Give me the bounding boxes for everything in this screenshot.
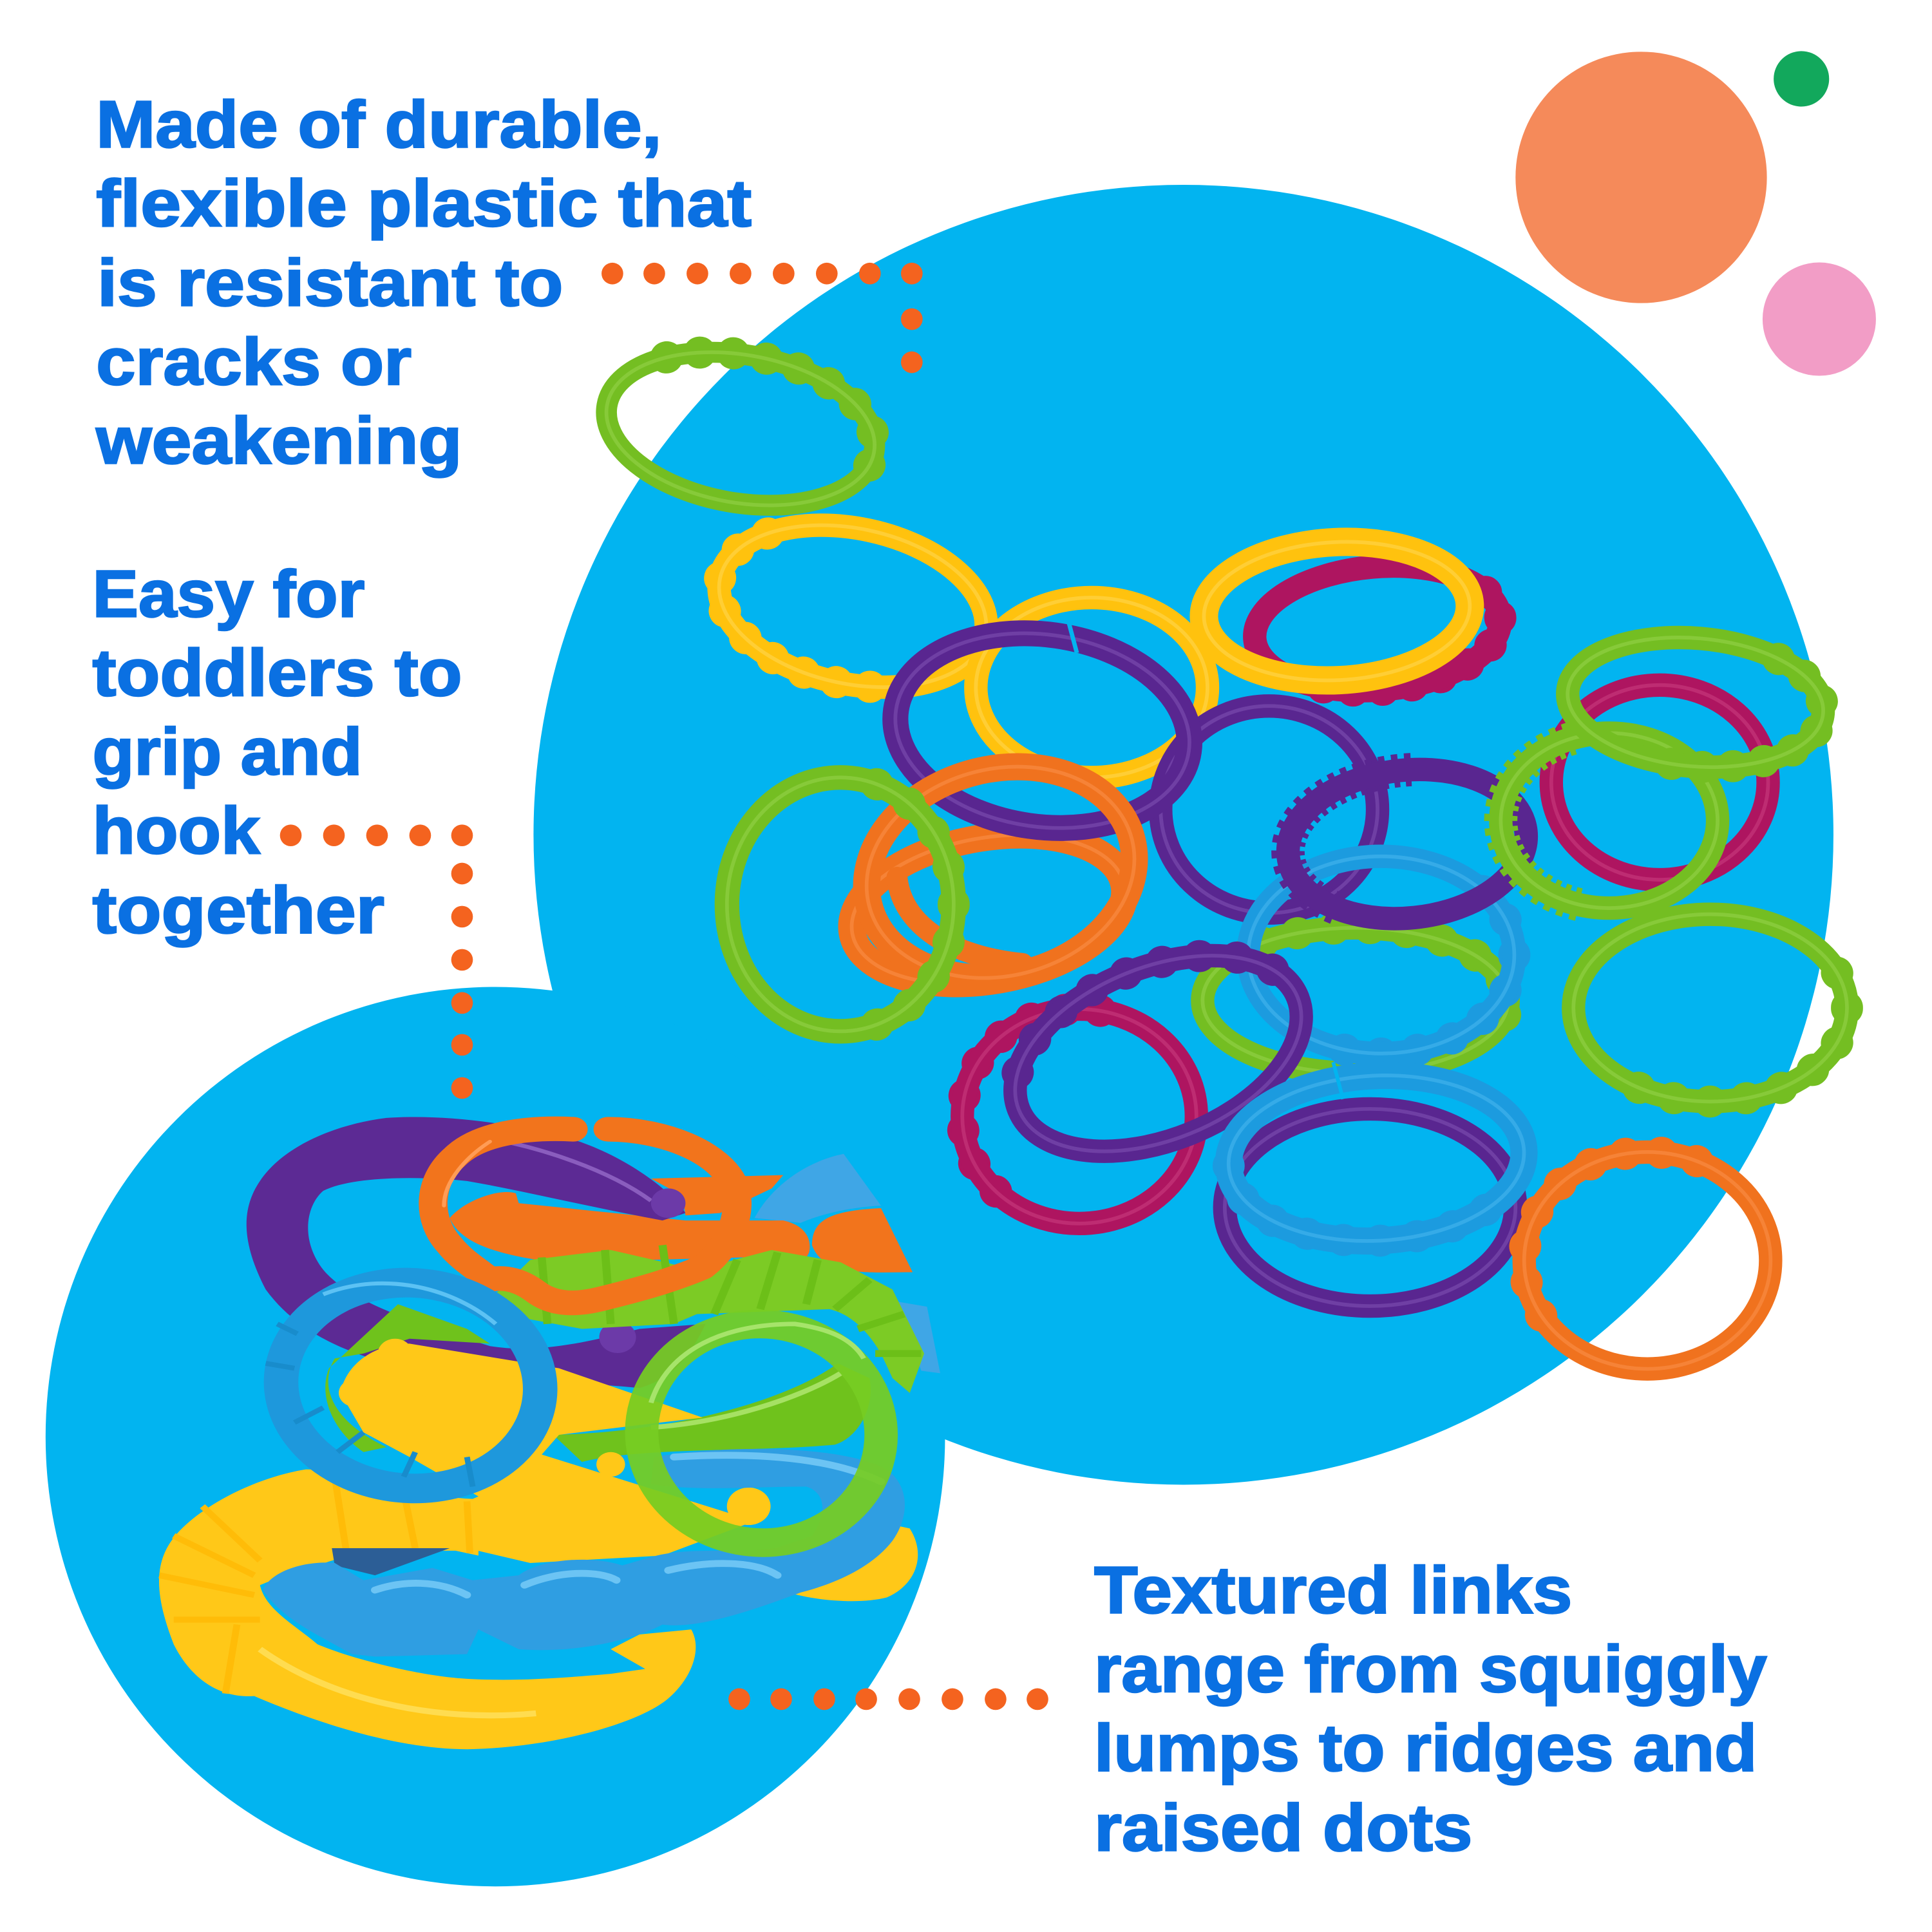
heading: textured links (1094, 1552, 1767, 1865)
ring: orange bars background (450, 1175, 913, 1273)
ring: blue curve background (755, 1154, 881, 1223)
ring: orange back (840, 815, 1137, 1003)
ring: blue oval (1224, 1068, 1528, 1248)
photo: scattered rings (594, 332, 1847, 1369)
heading: easy for toddlers: hook (92, 793, 260, 867)
ring: yellow middle (976, 598, 1208, 777)
ring: green wavy right (1573, 914, 1847, 1101)
heading: easy for toddlers: toddlers to (92, 635, 462, 710)
heading: textured links: lumps to ridges and (1094, 1710, 1757, 1785)
ring: blue right fragment (898, 1302, 940, 1373)
ring: dark purple middle (1160, 706, 1378, 913)
ring: magenta behind yellow (1249, 556, 1506, 701)
heading: easy for toddlers: grip and (92, 714, 362, 788)
heading: durable plastic: weakening (95, 402, 462, 477)
ring: magenta right (1551, 685, 1768, 880)
heading: easy for toddlers: Easy for (92, 556, 365, 631)
ring: green top (594, 332, 887, 525)
ring: yellow top right (1200, 535, 1473, 687)
large blue background circle (533, 185, 1833, 1484)
gap: purple ring split (1067, 616, 1077, 653)
heading: textured links: raised dots (1094, 1790, 1472, 1865)
ring: green light front (629, 1314, 894, 1553)
heading: durable plastic (95, 87, 752, 477)
gap: blue ring split (1333, 1062, 1343, 1099)
ring: orange inner loop (897, 877, 1023, 963)
heading: durable plastic: cracks or (96, 324, 412, 399)
heading: textured links: range from squiggly (1094, 1631, 1767, 1706)
ring: green loop back (325, 1304, 871, 1462)
photo: close-up rings (159, 1117, 940, 1749)
ring: orange bottom right (1524, 1152, 1770, 1369)
heading: textured links: Textured links (1094, 1552, 1572, 1627)
ring: orange front (844, 739, 1157, 1005)
ring: green under blue (1202, 928, 1508, 1073)
ring: large purple (247, 1117, 706, 1388)
decorative circles (1515, 51, 1876, 376)
heading: durable plastic: Made of durable, (96, 87, 661, 162)
ring: big yellow (159, 1470, 696, 1749)
ring: blue small (259, 1262, 563, 1509)
ring: orange split (433, 1129, 737, 1303)
ring: purple ribbed (1280, 758, 1534, 930)
heading: durable plastic: flexible plastic that (96, 166, 752, 240)
ring: green ribbed right (1501, 733, 1718, 908)
ring: purple dotted (987, 917, 1330, 1189)
dotted leader: easy for toddlers (280, 824, 473, 1099)
ring: yellow diagonal (339, 1339, 918, 1601)
heading: easy for toddlers: together (92, 872, 384, 947)
ring: blue thick (263, 1449, 905, 1656)
small blue background circle (46, 987, 945, 1886)
ring: purple lower (1225, 1109, 1515, 1306)
dotted leader: durable plastic (601, 263, 923, 373)
ring: green left (727, 777, 954, 1031)
dotted leader: textured links (728, 1689, 1048, 1710)
ring: ribbed green (490, 1245, 924, 1393)
ring: purple split (882, 615, 1202, 846)
heading: easy for toddlers (92, 556, 462, 947)
ring: blue wavy (1248, 857, 1514, 1054)
ring: green top right (1562, 627, 1829, 777)
heading: durable plastic: is resistant to (97, 245, 563, 319)
ring: yellow left (704, 502, 1001, 710)
ring: magenta lower (962, 1009, 1197, 1224)
